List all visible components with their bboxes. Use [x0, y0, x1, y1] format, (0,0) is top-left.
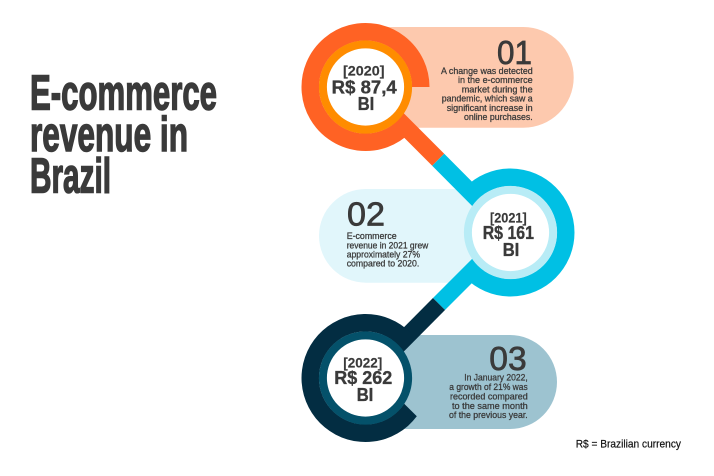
text block: 03: to the same month	[452, 400, 528, 411]
text block: 03: 03	[489, 340, 527, 377]
panel: 03 background	[340, 335, 557, 429]
label: 2020 value: BI	[358, 93, 374, 114]
text block: 03: In January 2022,	[464, 372, 528, 383]
node: 2022 ring	[302, 314, 417, 442]
text block: 01: pandemic, which saw a	[442, 93, 533, 104]
connector: dark segment	[366, 304, 439, 378]
node: 2021 ring	[468, 177, 566, 288]
text block: 01: A change was detected	[441, 65, 533, 76]
label: 2022 value	[334, 354, 392, 405]
text block: 03: of the previous year.	[449, 409, 528, 420]
text block: 02: compared to 2020.	[347, 258, 419, 269]
text block: 01: in the e-commerce	[458, 74, 533, 85]
label: 2022 value: R$ 262	[334, 367, 392, 388]
connector: lower cyan segment	[439, 232, 510, 304]
text block: 02: 02	[347, 196, 385, 233]
text block: 01	[441, 34, 533, 122]
connector: orange segment	[366, 87, 438, 160]
label: 2021 value: BI	[503, 239, 519, 260]
panel: 01 background	[340, 27, 574, 128]
connector: upper cyan segment	[438, 160, 510, 232]
text block: 02: approximately 27%	[347, 248, 420, 260]
text block: 03: recorded compared	[450, 390, 528, 402]
text block: 01: 01	[497, 34, 532, 71]
panel: 02 background	[319, 189, 519, 283]
footnote: R$ = Brazilian currency	[576, 438, 681, 450]
label: 2020 value: [2020]	[343, 62, 384, 78]
title	[30, 65, 217, 204]
title: revenue in	[30, 107, 188, 162]
label: 2022 value: [2022]	[343, 354, 382, 370]
text block: 03: a growth of 21% was	[449, 381, 528, 392]
text block: 01: online purchases.	[464, 111, 533, 122]
label: 2020 value	[332, 62, 397, 114]
label: 2022 value: BI	[357, 384, 373, 405]
text block: 02: E-commerce	[347, 230, 397, 241]
node: 2020 ring	[310, 32, 421, 142]
text block: 02	[347, 196, 429, 269]
title: E-commerce	[30, 65, 217, 120]
label: 2021 value: R$ 161	[483, 222, 534, 243]
text block: 03	[449, 340, 528, 420]
label: 2021 value	[483, 210, 534, 260]
text block: 01: significant increase in	[447, 102, 533, 113]
text block: 01: market during the	[462, 83, 533, 94]
text block: 02: revenue in 2021 grew	[347, 239, 429, 250]
label: 2021 value: [2021]	[490, 210, 527, 226]
label: 2020 value: R$ 87,4	[332, 76, 397, 97]
title: Brazil	[30, 148, 111, 204]
